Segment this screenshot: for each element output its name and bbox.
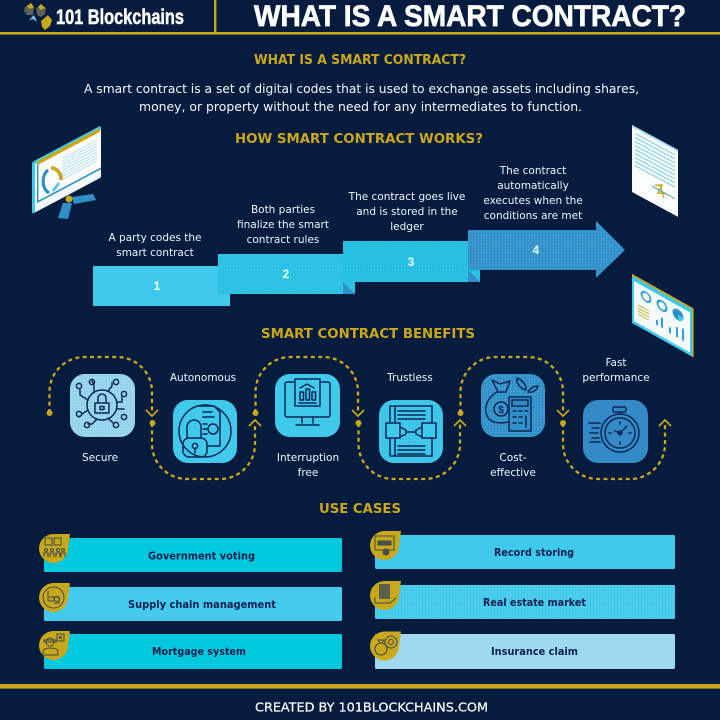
badge icon: mortgage adviser [39,631,70,660]
benefit: cost-effective [481,374,545,479]
benefit: fast performance [582,357,650,463]
label: Secure [82,452,118,464]
heading: what is a smart contract: WHAT IS A SMART CONTRACT? [254,52,466,68]
step 1 label: smart contract [116,247,194,259]
step 1 label: A party codes the [109,232,201,244]
label: Record storing [494,547,574,559]
label: Government voting [148,550,255,562]
label: performance [582,372,650,384]
step 4 label [483,165,583,222]
label [490,452,536,479]
step 2 label: contract rules [247,234,319,246]
step 4 label: The contract [499,165,566,177]
definition paragraph: money, or property without the need for any intermediates to function. [139,99,582,114]
dashed flow path [46,357,671,479]
step 1: 1 [154,279,161,293]
main title: WHAT IS A SMART CONTRACT? [254,0,686,33]
step 2 label: Both parties [251,204,315,216]
step 2 [218,254,355,294]
label: Fast [605,357,627,369]
step 3 label: and is stored in the [356,206,458,218]
step 1 label [109,232,201,259]
step 4 label: automatically [497,180,569,192]
use case: government voting [39,534,342,572]
label: free [298,467,318,479]
process arrow steps [93,221,625,306]
use case: supply chain management [39,583,342,621]
benefit: secure [70,374,135,464]
label: Interruption [277,452,339,464]
label: Mortgage system [152,646,246,658]
step 3 label: ledger [390,221,424,233]
step 3: 3 [408,255,415,269]
icon: secure lock network [70,374,135,437]
label [582,357,650,384]
step 4 label: executes when the [483,195,583,207]
label: Cost- [499,452,527,464]
step 3 [343,241,480,282]
icon: chained documents [379,400,443,463]
label: effective [490,467,536,479]
footer [0,684,720,714]
label: Insurance claim [491,646,578,658]
badge icon: money and gears [370,632,401,660]
step 4 arrow [468,221,625,278]
badge icon: voters [39,534,70,563]
logo: 101 Blockchains: 101 Blockchains [56,6,184,29]
step 3 label: The contract goes live [348,191,465,203]
icon: padlock and document [173,400,237,463]
icon: isometric dashboard [632,274,694,357]
benefit: trustless [379,372,443,463]
footer: CREATED BY 101BLOCKCHAINS.COM [255,700,488,714]
icon: signed document [632,125,678,217]
benefit: interruption free [275,374,340,479]
heading: how smart contract works: HOW SMART CONTRACT WORKS? [235,131,483,147]
icon: monitor chart [275,374,340,437]
heading: use cases: USE CASES [319,501,401,517]
definition paragraph [84,81,639,114]
step 2 label [237,204,329,246]
heading: benefits: SMART CONTRACT BENEFITS [261,326,475,342]
icon: stopwatch [583,400,648,463]
step 2: 2 [283,267,290,281]
step 3 label [348,191,465,233]
logo: 101 Blockchains [24,3,184,30]
use case: mortgage system [39,631,342,669]
step 1 [93,266,230,306]
badge icon: building in hand [370,581,401,610]
icon: isometric monitor [32,125,101,219]
label: Trustless [386,372,433,384]
label: Autonomous [170,372,236,384]
label [277,452,339,479]
benefit: autonomous [170,372,237,463]
badge icon: records [370,531,401,560]
use case: real estate market [370,581,675,619]
badge icon: supply chain [39,583,70,612]
use case: record storing [370,531,675,569]
label: Supply chain management [128,599,276,611]
definition paragraph: A smart contract is a set of digital codes that is used to exchange assets including shares, [84,81,639,96]
header bar [0,0,720,35]
step 2 label: finalize the smart [237,219,329,231]
icon: money bag and calculator: $ [498,405,504,416]
label: Real estate market [483,597,586,609]
use case: insurance claim [370,632,675,669]
step 4 arrow: 4 [533,243,540,257]
step 4 label: conditions are met [484,210,582,222]
